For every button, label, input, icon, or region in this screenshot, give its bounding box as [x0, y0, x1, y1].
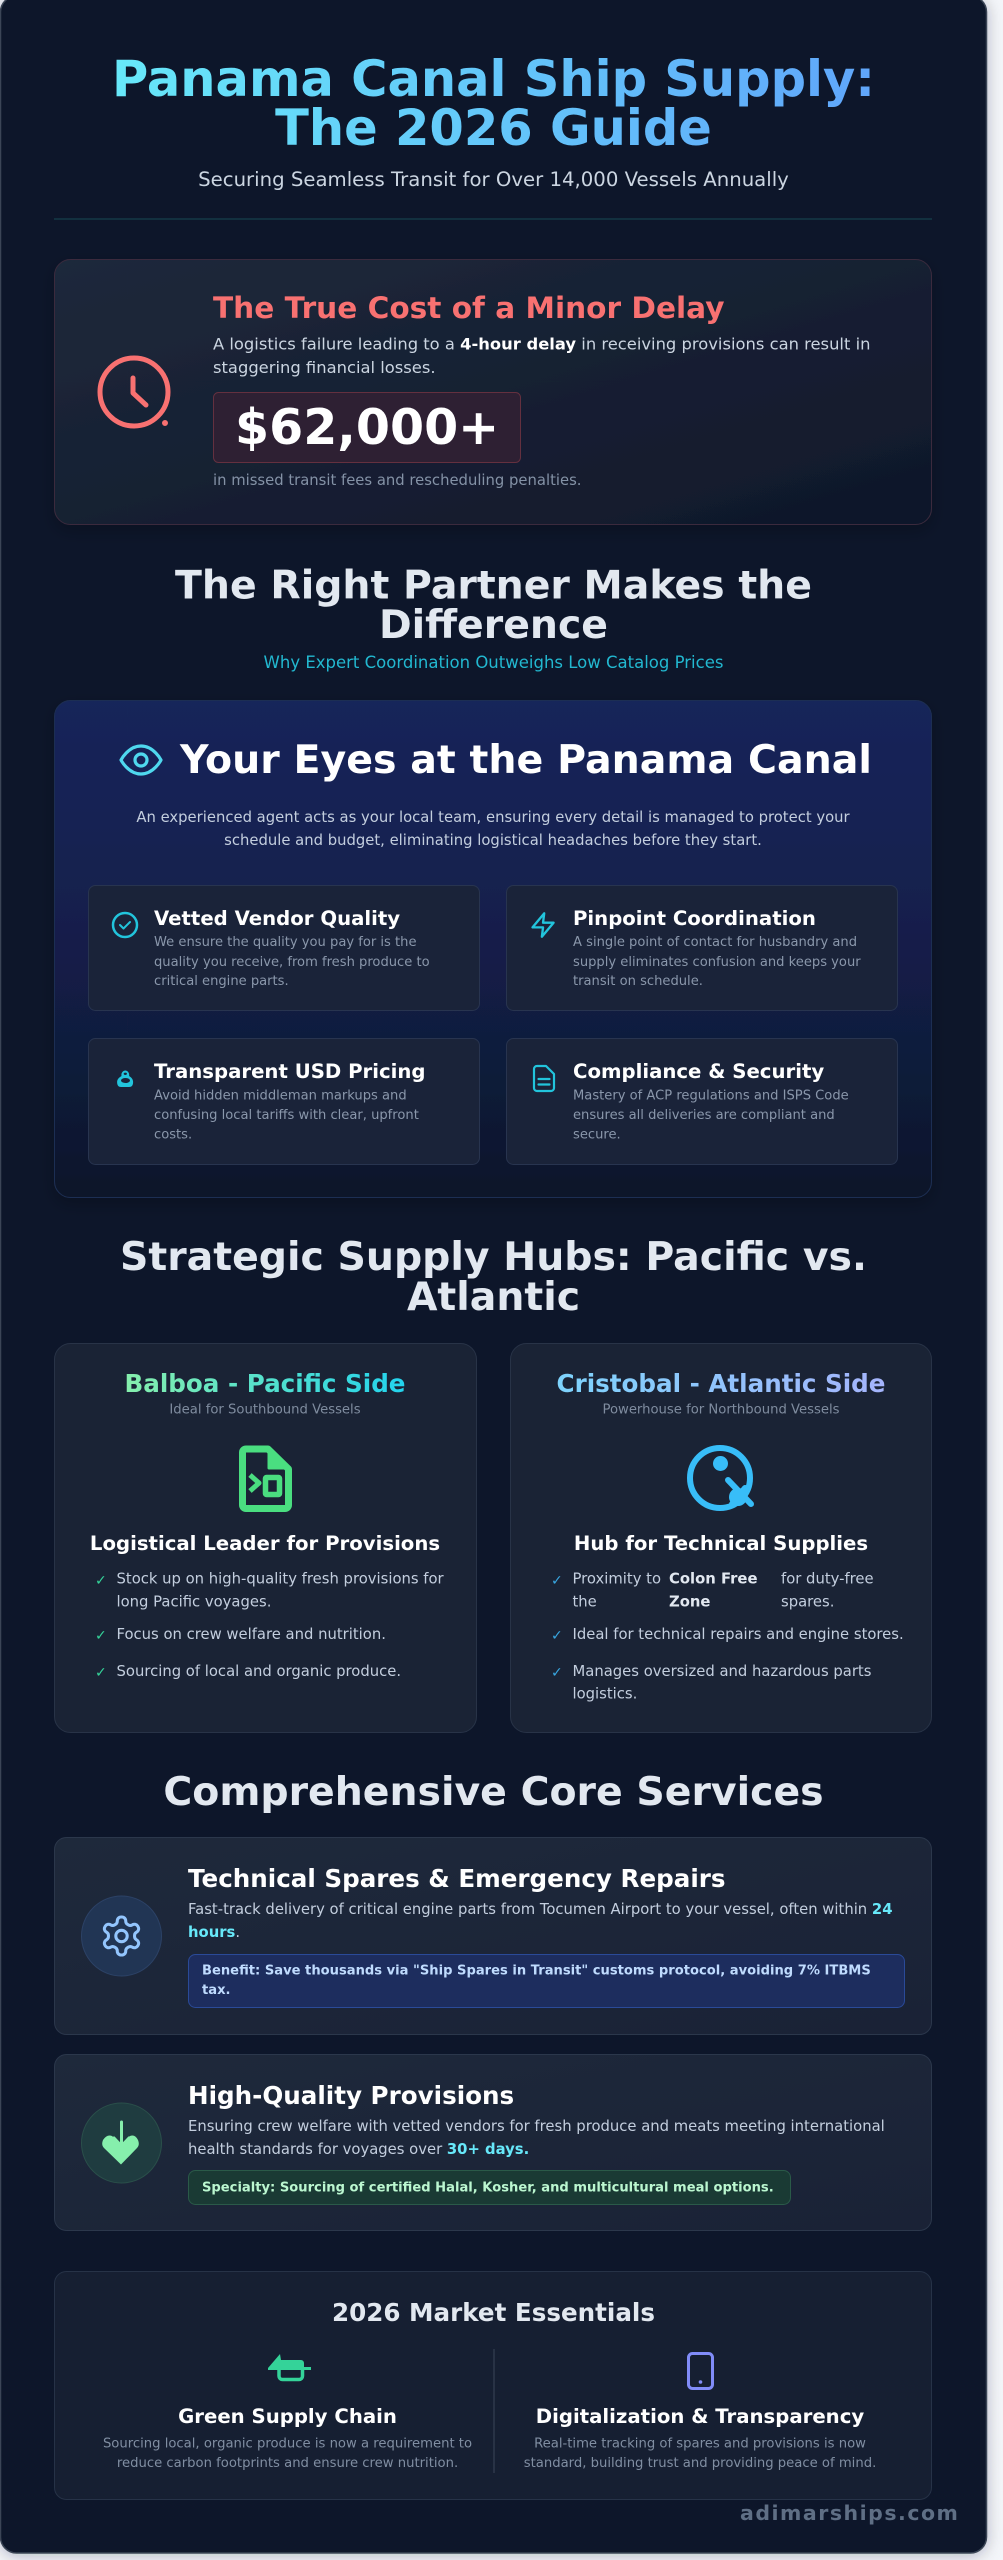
list: Focus on crew welfare and nutrition. — [116, 1626, 386, 1643]
icon: document — [534, 1066, 554, 1091]
list: ✓ — [95, 1573, 107, 1589]
panel: Cristobal: Powerhouse for Northbound Vessels — [602, 1402, 840, 1418]
panel: Balboa: Ideal for Southbound Vessels — [169, 1402, 361, 1418]
card: transparent USD pricing: costs. — [154, 1128, 192, 1142]
card: transparent USD pricing: confusing local tariffs with clear, upfront — [154, 1108, 419, 1123]
list: long Pacific voyages. — [116, 1594, 271, 1611]
heading: 2026 Market Essentials — [332, 2298, 655, 2327]
title: Panama Canal Ship Supply: — [112, 50, 875, 108]
description: An experienced agent acts as your local team, ensuring every detail is managed to protect your — [136, 809, 851, 826]
card: compliance and security: Mastery of ACP regulations and ISPS Code — [573, 1088, 849, 1104]
panel: provisions: 30+ days. — [447, 2141, 529, 2158]
card: transparent USD pricing: Transparent USD Pricing — [154, 1060, 426, 1083]
callout: specialty — [188, 2170, 790, 2204]
card: transparent USD pricing: Avoid hidden middleman markups and — [154, 1088, 407, 1104]
text block: 4-hour delay in receiving provisions can result in — [460, 334, 870, 354]
panel: technical spares: hours — [188, 1924, 236, 1941]
panel heading: Your Eyes at the Panama Canal — [179, 737, 872, 783]
icon: lightning bolt — [533, 913, 554, 937]
list: logistics. — [572, 1686, 637, 1703]
panel: market essentials: Real-time tracking of spares and provisions is now — [534, 2437, 866, 2452]
list: Ideal for technical repairs and engine stores. — [572, 1626, 904, 1643]
list — [95, 1571, 445, 1681]
list: Zone — [669, 1594, 710, 1611]
panel: Balboa — [54, 1344, 476, 1732]
icon: phone — [688, 2354, 712, 2388]
callout: benefit: Benefit: Save thousands via "Ship Spares in Transit" customs protocol, avoiding 7% ITBMS — [202, 1964, 871, 1978]
list: ✓ — [95, 1665, 107, 1681]
heading: Cristobal - Atlantic Side — [557, 1369, 885, 1398]
list — [551, 1571, 904, 1703]
title: The 2026 Guide — [275, 99, 712, 157]
card: pinpoint coordination: Pinpoint Coordination — [573, 907, 816, 930]
feature: digitalization: Digitalization & Transparency — [536, 2405, 864, 2428]
list: Manages oversized and hazardous parts — [572, 1663, 871, 1680]
section heading: supply hubs: Strategic Supply Hubs: Pacific vs. — [120, 1234, 867, 1280]
panel: provisions: High-Quality Provisions — [188, 2081, 514, 2110]
subheading: Why Expert Coordination Outweighs Low Catalog Prices — [264, 653, 723, 672]
card: pinpoint coordination — [506, 886, 898, 1010]
list: Proximity to — [572, 1571, 661, 1588]
panel: provisions — [54, 2054, 932, 2230]
list: Stock up on high-quality fresh provisions for — [116, 1571, 445, 1588]
list: for duty-free — [781, 1571, 874, 1588]
caption: in missed transit fees and rescheduling penalties. — [213, 472, 582, 489]
panel: provisions: Ensuring crew welfare with vetted vendors for fresh produce and meats meeting international — [188, 2118, 885, 2135]
panel: technical spares: . — [235, 1924, 240, 1941]
panel: market essentials: standard, building trust and providing peace of mind. — [524, 2456, 876, 2471]
card: compliance and security: secure. — [573, 1128, 621, 1142]
panel: cost of delay — [54, 260, 932, 524]
icon: check circle — [113, 913, 137, 937]
panel: technical spares: Technical Spares & Emergency Repairs — [188, 1864, 726, 1893]
panel: Cristobal — [510, 1344, 932, 1732]
list: ✓ — [551, 1628, 563, 1644]
section heading: right partner — [175, 562, 812, 672]
icon: green file — [242, 1449, 289, 1508]
icon: eye — [121, 746, 161, 774]
card: vetted vendor quality: quality you receive, from fresh produce to — [154, 955, 430, 970]
card: pinpoint coordination: transit on schedule. — [573, 974, 703, 989]
list: ✓ — [551, 1573, 563, 1589]
section heading: supply hubs: Atlantic — [407, 1274, 580, 1320]
feature: green supply chain: Green Supply Chain — [178, 2405, 397, 2428]
card: pinpoint coordination: supply eliminates confusion and keeps your — [573, 955, 861, 970]
list: ✓ — [95, 1628, 107, 1644]
card: vetted vendor quality: Vetted Vendor Quality — [154, 907, 400, 930]
header — [112, 50, 875, 191]
card: compliance and security — [506, 1038, 898, 1164]
list: Sourcing of local and organic produce. — [116, 1663, 401, 1680]
panel: market essentials: reduce carbon footprints and ensure crew nutrition. — [117, 2456, 458, 2471]
panel: technical spares: 24 — [872, 1901, 892, 1918]
list: Colon Free — [669, 1571, 757, 1588]
card: vetted vendor quality: We ensure the quality you pay for is the — [154, 935, 417, 950]
section heading: right partner: The Right Partner Makes the — [175, 562, 812, 608]
icon: clock — [100, 358, 168, 426]
list: ✓ — [551, 1665, 563, 1681]
panel: technical spares: Fast-track delivery of critical engine parts from Tocumen Airport to your vessel, often within — [188, 1901, 872, 1918]
panel: provisions: health standards for voyages over — [188, 2141, 447, 2158]
panel: Cristobal: Hub for Technical Supplies — [574, 1532, 868, 1555]
description: schedule and budget, eliminating logistical headaches before they start. — [224, 832, 762, 849]
text block: staggering financial losses. — [213, 358, 436, 377]
panel: Balboa: Logistical Leader for Provisions — [90, 1532, 440, 1555]
card: compliance and security: ensures all deliveries are compliant and — [573, 1108, 835, 1123]
icon: heart with arrow — [82, 2103, 162, 2183]
callout: specialty: Specialty: Sourcing of certified Halal, Kosher, and multicultural meal options. — [202, 2181, 774, 2196]
card: vetted vendor quality — [88, 886, 480, 1010]
panel: technical spares — [54, 1838, 932, 2034]
icon: money bag — [117, 1070, 133, 1087]
subtitle: Securing Seamless Transit for Over 14,000 Vessels Annually — [198, 168, 789, 191]
card: vetted vendor quality: critical engine parts. — [154, 974, 289, 989]
footer watermark: adimarships.com — [740, 2501, 959, 2525]
section heading: core services: Comprehensive Core Services — [163, 1769, 824, 1815]
card: pinpoint coordination: A single point of contact for husbandry and — [573, 935, 857, 950]
section heading: right partner: Difference — [379, 602, 608, 648]
heading: The True Cost of a Minor Delay — [213, 291, 725, 325]
icon: blue search tool — [690, 1448, 751, 1508]
heading: Balboa - Pacific Side — [125, 1369, 405, 1398]
list: spares. — [781, 1594, 834, 1611]
stat: $62,000+: $62,000+ — [235, 399, 499, 456]
panel: your eyes at the Panama Canal — [54, 700, 932, 1198]
panel: market essentials: Sourcing local, organic produce is now a requirement to — [103, 2437, 472, 2452]
text block: A logistics failure leading to a — [213, 334, 460, 354]
list: the — [572, 1594, 597, 1611]
icon: gear — [82, 1896, 162, 1976]
callout: benefit — [188, 1954, 904, 2008]
callout: benefit: tax. — [202, 1983, 231, 1998]
panel: market essentials — [54, 2272, 932, 2500]
card: transparent USD pricing — [88, 1038, 480, 1164]
icon: green basket — [268, 2354, 311, 2380]
card: compliance and security: Compliance & Security — [573, 1060, 824, 1083]
